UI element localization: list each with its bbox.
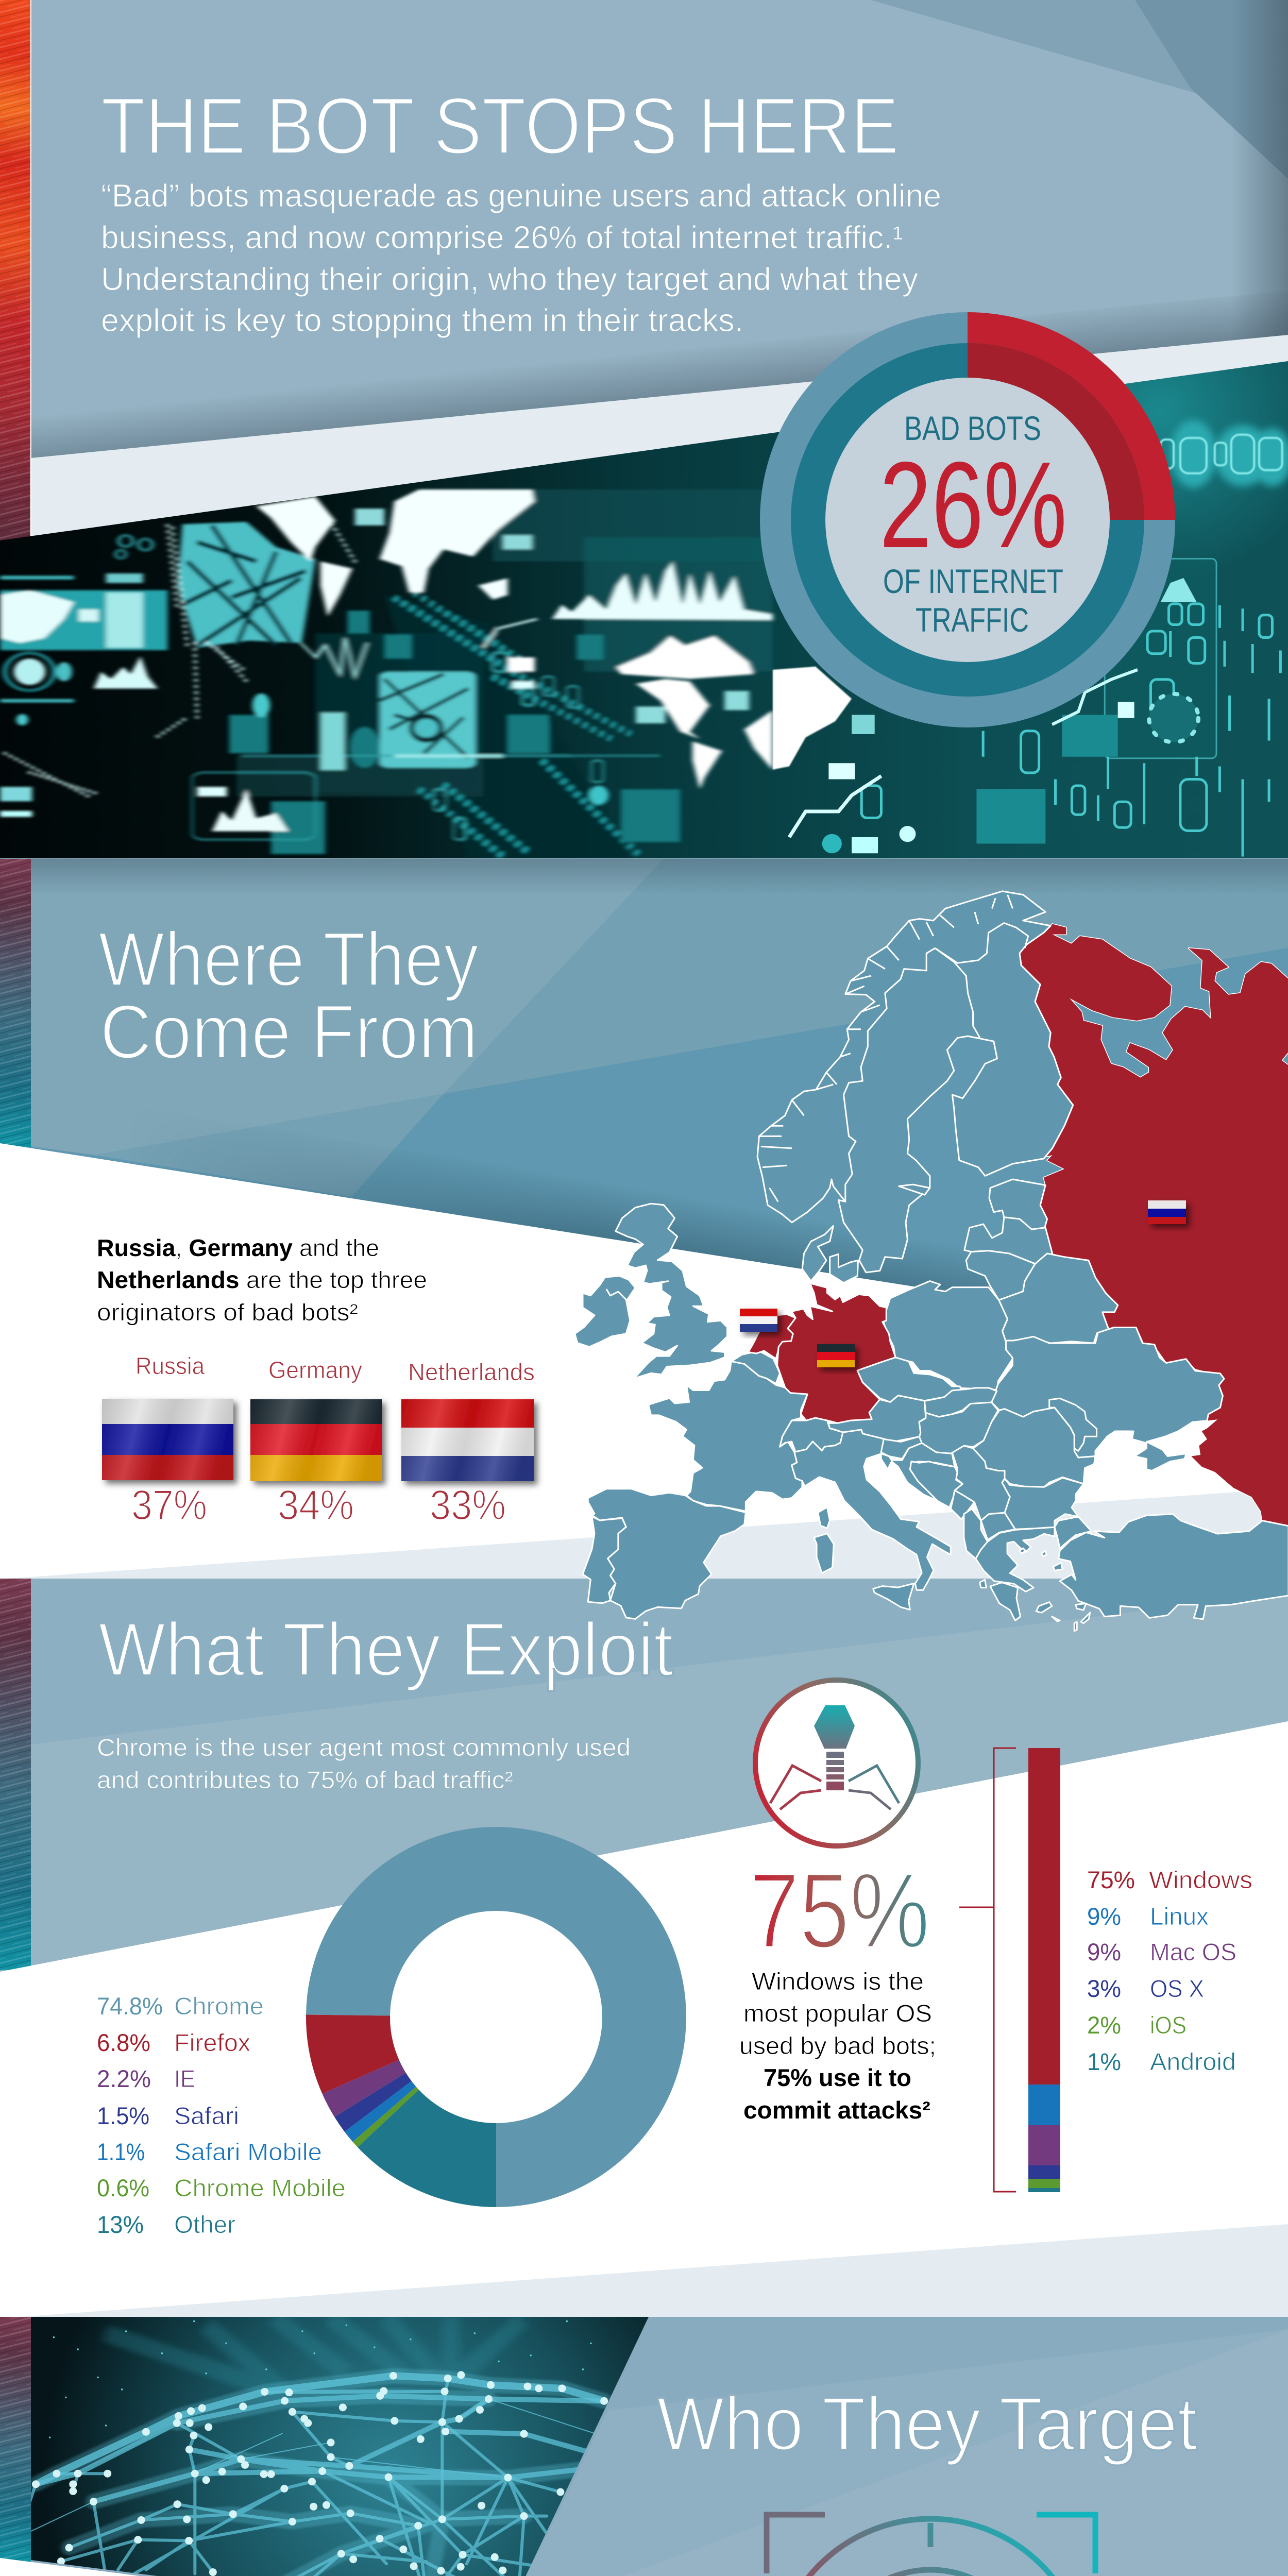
stat: 75% Windows: Windows is the — [752, 1968, 924, 1995]
legend: operating systems: 3% — [1087, 1975, 1121, 2002]
Western Europe — [575, 1204, 961, 1619]
legend: operating systems: Android — [1150, 2048, 1236, 2075]
map of Europe with top origin countries highlighted — [575, 891, 1288, 1631]
section background: hero — [0, 0, 1288, 859]
map marker flag: Russia — [1148, 1200, 1186, 1224]
heading: Where They Come From: Where They — [98, 916, 479, 1002]
white panel: who they target — [0, 2558, 1288, 2576]
donut chart: user agents — [306, 1827, 686, 2207]
text: top three originators — [97, 1234, 427, 1326]
stat: 75% Windows: most popular OS — [743, 1999, 932, 2027]
flag card: Germany 34%: Germany — [268, 1357, 362, 1383]
heading: Where They Come From: Come From — [100, 989, 478, 1075]
heading: What They Exploit: What They Exploit — [98, 1607, 673, 1692]
legend: user agents: 1.5% — [97, 2102, 149, 2129]
intro paragraph: “Bad” bots masquerade as genuine users and attack online — [101, 178, 941, 214]
section background: what they exploit — [0, 1579, 1288, 2318]
text: Chrome user agent — [97, 1734, 631, 1793]
image: glowing network globe — [26, 2317, 649, 2576]
legend: user agents: Other — [174, 2211, 235, 2238]
donut chart: 26% of internet traffic: TRAFFIC — [916, 601, 1029, 639]
stat: 75% Windows: used by bad bots; — [739, 2032, 936, 2059]
legend: operating systems: 9% — [1087, 1903, 1121, 1930]
title: The Bot Stops Here: THE BOT STOPS HERE — [101, 81, 899, 171]
intro paragraph — [101, 178, 941, 338]
donut chart: 26% of internet traffic — [760, 312, 1175, 727]
donut chart: 26% of internet traffic: 26% — [879, 437, 1067, 573]
legend: operating systems: 1% — [1087, 2048, 1121, 2075]
donut chart: 26% of internet traffic: BAD BOTS — [904, 409, 1041, 447]
flag card: Russia 37% — [102, 1352, 233, 1529]
legend: operating systems: Linux — [1150, 1903, 1209, 1930]
legend: user agents: IE — [174, 2065, 195, 2092]
stat: 75% Windows — [739, 1851, 936, 2124]
legend: user agents: Safari — [174, 2102, 239, 2129]
text: top three originators: Russia, Germany and the — [97, 1234, 379, 1261]
flag card: Russia 37%: 37% — [131, 1482, 207, 1529]
flag card: Germany 34%: 34% — [278, 1482, 354, 1529]
flag card: Germany 34% — [250, 1357, 382, 1529]
text: top three originators: originators of bad bots² — [97, 1299, 358, 1326]
legend: operating systems: 75% — [1087, 1866, 1135, 1893]
legend: user agents: 2.2% — [97, 2065, 151, 2092]
legend: user agents: Chrome — [174, 1992, 264, 2020]
heading: Who They Target: Who They Target — [657, 2382, 1197, 2466]
legend: operating systems: OS X — [1150, 1975, 1204, 2002]
legend: user agents: Chrome Mobile — [174, 2174, 346, 2201]
Eastern and south-eastern Europe — [881, 1328, 1288, 1631]
Russia — [1020, 924, 1288, 1526]
legend: user agents: 6.8% — [97, 2029, 150, 2056]
map marker flag: Netherlands — [740, 1309, 777, 1332]
legend: operating systems: Mac OS — [1150, 1938, 1236, 1965]
stacked bar chart: operating systems — [959, 1748, 1060, 2192]
legend: user agents: Firefox — [174, 2029, 250, 2056]
legend: operating systems: 2% — [1087, 2011, 1121, 2039]
stat: 75% Windows: 75% — [749, 1851, 930, 1971]
section background: where they come from — [0, 859, 1288, 1579]
flag card: Netherlands 33%: 33% — [430, 1482, 506, 1529]
text: Chrome user agent: Chrome is the user agent most commonly used — [97, 1734, 631, 1761]
text: top three originators: Netherlands are the top three — [97, 1266, 427, 1293]
legend: user agents: Safari Mobile — [174, 2138, 322, 2165]
map marker flag: Germany — [817, 1344, 855, 1367]
intro paragraph: exploit is key to stopping them in their tracks. — [101, 303, 743, 338]
flag card: Netherlands 33%: Netherlands — [408, 1359, 535, 1385]
hero image: data visualisation with glowing world maps — [0, 350, 1288, 860]
legend: operating systems: Windows — [1149, 1866, 1252, 1893]
intro paragraph: Understanding their origin, who they target and what they — [101, 262, 918, 297]
stat: 75% Windows: 75% use it to — [764, 2064, 911, 2091]
stat: 75% Windows: commit attacks² — [743, 2096, 930, 2124]
icon: radar target — [767, 2515, 1095, 2576]
section background: who they target — [0, 2317, 1288, 2576]
donut chart: 26% of internet traffic: OF INTERNET — [883, 562, 1063, 600]
legend: user agents: 1.1% — [97, 2138, 145, 2165]
legend: operating systems: iOS — [1150, 2011, 1187, 2039]
legend: operating systems — [1087, 1866, 1252, 2075]
intro paragraph: business, and now comprise 26% of total internet traffic.¹ — [101, 220, 903, 256]
heading: Where They Come From — [98, 916, 479, 1075]
legend: user agents: 0.6% — [97, 2174, 149, 2201]
legend: user agents — [97, 1992, 346, 2238]
flag card: Russia 37%: Russia — [135, 1352, 205, 1379]
text: Chrome user agent: and contributes to 75% of bad traffic² — [97, 1766, 513, 1793]
Scandinavia, Baltics, Poland, Belarus — [757, 891, 1118, 1389]
legend: operating systems: 9% — [1087, 1938, 1121, 1965]
icon: bacteriophage in circle — [755, 1680, 918, 1846]
legend: user agents: 74.8% — [97, 1992, 163, 2020]
legend: user agents: 13% — [97, 2211, 144, 2238]
flag card: Netherlands 33% — [401, 1359, 535, 1529]
